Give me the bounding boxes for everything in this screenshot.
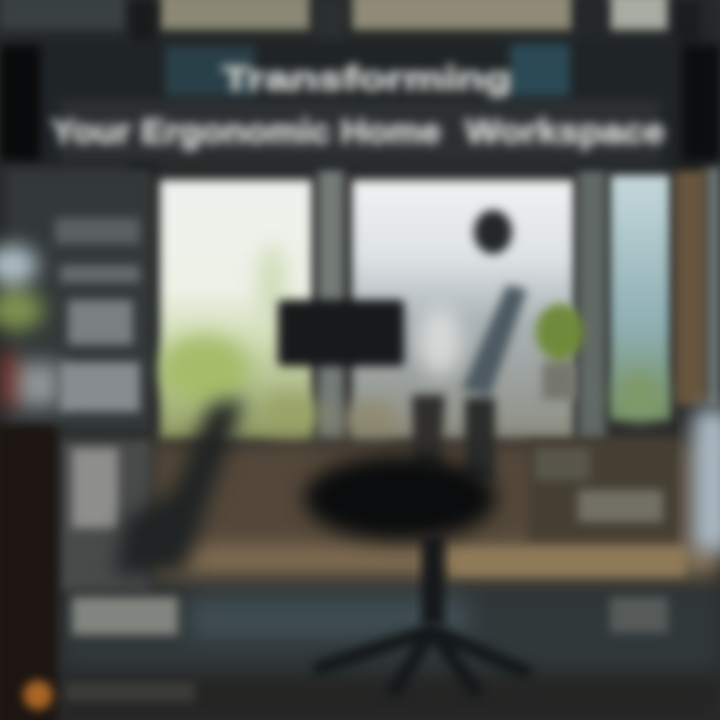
title text: Transforming	[222, 60, 512, 98]
chair headrest	[474, 210, 512, 254]
main windows	[160, 175, 670, 440]
left plant and lamp	[0, 245, 60, 407]
left dark cabinet	[0, 425, 57, 720]
left shelving	[8, 170, 178, 635]
monitor	[278, 300, 404, 366]
side chair	[115, 398, 245, 575]
orange accent	[23, 680, 53, 710]
window columns	[130, 0, 720, 440]
top window strip	[0, 0, 720, 40]
title text: Workspace	[465, 113, 665, 151]
office chair	[304, 210, 527, 690]
chair backrest	[412, 285, 527, 480]
right plant	[536, 304, 584, 400]
floor and rug	[60, 442, 720, 720]
title text	[51, 60, 665, 151]
bottom left label	[65, 682, 195, 702]
title band	[0, 40, 720, 165]
greenery outside	[160, 245, 664, 438]
title text: Your Ergonomic Home	[51, 113, 441, 151]
right white vase	[692, 408, 720, 553]
right shelf	[450, 442, 685, 633]
chair column	[422, 535, 444, 625]
chair base	[320, 630, 525, 690]
chair seat	[304, 456, 496, 540]
